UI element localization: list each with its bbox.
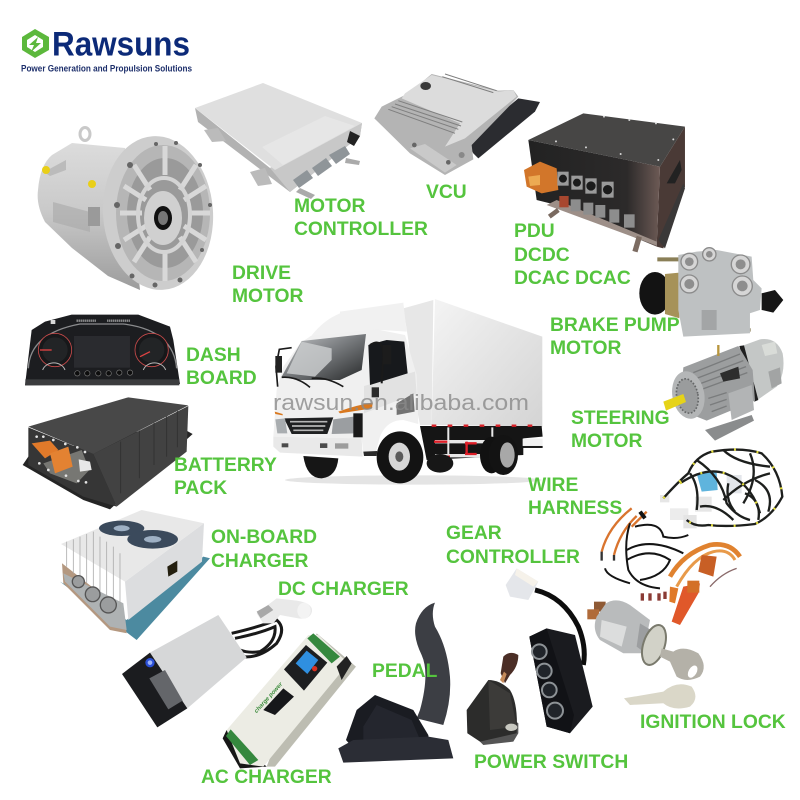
- label: battery pack: PACK: [174, 478, 227, 499]
- truck windshield: [282, 334, 366, 380]
- pedal base plate: [338, 737, 453, 763]
- controller top lid: [195, 83, 362, 170]
- switch black housing: [467, 680, 517, 742]
- PDU orange connector: [524, 162, 558, 193]
- terminal box: [720, 367, 740, 382]
- DC charger photo: [122, 598, 312, 727]
- thin purple lead: [710, 568, 737, 587]
- PDU base strip: [547, 200, 657, 246]
- motor hub and bearing: [144, 191, 182, 245]
- red and white side guard: [434, 427, 497, 457]
- truck grille: [284, 417, 333, 434]
- truck left mirror: [276, 348, 292, 387]
- wire harness photo: [602, 450, 782, 625]
- ignition bezel: [637, 622, 671, 668]
- orange and red connector bundle: [672, 583, 700, 625]
- dash housing: [25, 315, 180, 385]
- battery connector plate: [43, 450, 89, 483]
- battery right side: [93, 406, 188, 507]
- brake pump motor photo: [639, 248, 783, 337]
- dash centre screen: [74, 336, 130, 368]
- truck sun shade: [287, 342, 332, 377]
- label: PDU DCDC DCAC: PDU: [514, 221, 555, 242]
- label: steering motor: MOTOR: [571, 431, 642, 452]
- truck chassis frame: [420, 426, 543, 460]
- switch mounting hole: [505, 724, 517, 731]
- dash buttons: [75, 370, 133, 376]
- watermark: rawsun.en.alibaba.com: [273, 390, 529, 415]
- harness red terminals: [641, 592, 667, 601]
- pump studs: [657, 257, 680, 261]
- charger blue mounting plate: [60, 557, 210, 640]
- pump rubber dome: [639, 272, 671, 315]
- DC charger white gun: [257, 598, 312, 623]
- label: ignition lock: IGNITION LOCK: [640, 712, 786, 733]
- VCU cooling ribs: [388, 74, 497, 133]
- on-board charger photo: [60, 510, 210, 640]
- label: drive motor: DRIVE: [232, 263, 291, 284]
- motor lifting eye: [80, 128, 90, 140]
- PDU top lid: [528, 113, 685, 167]
- gear controller cable: [535, 590, 584, 665]
- label: wire harness: HARNESS: [528, 498, 622, 519]
- charger round sockets: [72, 576, 116, 613]
- logo wordmark: Rawsuns: [52, 26, 190, 64]
- red marker dashes: [432, 422, 542, 429]
- dash bottom strip: [25, 379, 179, 385]
- gear controller black body: [529, 628, 593, 733]
- AC charger dark base: [223, 730, 267, 768]
- label: VCU: VCU: [426, 182, 467, 203]
- AC charger side panel: [267, 633, 356, 767]
- pump black connector: [762, 290, 783, 313]
- ignition lock photo: [587, 600, 704, 709]
- power switch photo: [467, 653, 518, 745]
- DC charger black front: [122, 653, 187, 727]
- gear controller photo: [506, 568, 593, 733]
- ignition cylinder: [595, 600, 650, 653]
- yellow plugs: [42, 166, 50, 174]
- label: AC charger: AC CHARGER: [201, 767, 332, 788]
- ignition neck: [637, 623, 657, 657]
- label: on-board charger: ON-BOARD: [211, 527, 317, 548]
- VCU photo: [374, 74, 540, 175]
- DC charger vent: [149, 670, 183, 709]
- label: motor controller: MOTOR: [294, 196, 365, 217]
- logo bolt: [29, 37, 41, 52]
- DC charger blue button: [145, 658, 155, 667]
- logo icon: green hexagon bolt: [22, 29, 49, 58]
- truck front wheels: [303, 431, 423, 483]
- truck ground shadow: [285, 475, 542, 485]
- drive motor photo: [38, 128, 218, 294]
- label: motor controller: CONTROLLER: [294, 219, 428, 240]
- dash telltale strip: [77, 317, 130, 324]
- label: PDU DCDC DCAC: DCAC DCAC: [514, 268, 631, 289]
- label: brake pump motor: BRAKE PUMP: [550, 315, 680, 336]
- motor rear cap: [740, 339, 784, 402]
- label: dash board: BOARD: [186, 368, 257, 389]
- truck headlights: [275, 418, 287, 433]
- truck bumper: [273, 437, 363, 457]
- label: pedal: PEDAL: [372, 661, 438, 682]
- charger right face: [125, 523, 204, 620]
- dash left gauge: [38, 333, 72, 367]
- truck rear wheels: [427, 435, 518, 475]
- pump brass band: [665, 273, 679, 318]
- VCU upper cover: [402, 75, 517, 147]
- pump aluminium body: [678, 250, 762, 337]
- charger heatsink top: [61, 510, 204, 582]
- label: power switch: POWER SWITCH: [474, 752, 628, 773]
- lifting ring: [715, 345, 722, 356]
- switch brown handle: [501, 653, 518, 683]
- label: gear controller: CONTROLLER: [446, 547, 580, 568]
- label: dash board: DASH: [186, 345, 241, 366]
- truck door vent: [397, 393, 415, 415]
- motor cylinder body: [38, 143, 140, 290]
- dash small gauges: [43, 363, 65, 370]
- PDU round connectors: [557, 172, 614, 198]
- VCU front mount: [410, 144, 457, 173]
- charger fans: [99, 521, 144, 536]
- battery orange connectors: [32, 441, 58, 458]
- label: brake pump motor: MOTOR: [550, 338, 621, 359]
- AC charger side socket: [337, 656, 352, 680]
- pedal housing: [346, 695, 430, 748]
- motor controller photo: [195, 83, 362, 199]
- dashboard photo: [25, 315, 180, 385]
- ignition rear key: [624, 684, 695, 709]
- logo tagline: Power Generation and Propulsion Solutions: [21, 64, 192, 74]
- dash right gauge: [135, 333, 168, 367]
- motor dark band: [739, 345, 758, 402]
- label: battery pack: BATTERRY: [174, 455, 277, 476]
- label: drive motor: MOTOR: [232, 286, 303, 307]
- label: wire harness: WIRE: [528, 475, 578, 496]
- yellow shaft: [663, 394, 686, 411]
- controller connectors: [293, 146, 360, 199]
- PDU front face: [528, 140, 660, 247]
- motor feet: [705, 415, 754, 441]
- PDU lower connectors: [559, 196, 635, 228]
- ignition copper terminals: [594, 602, 606, 612]
- steering motor photo: [663, 339, 784, 441]
- harness connector blocks: [697, 472, 718, 492]
- label: on-board charger: CHARGER: [211, 551, 309, 572]
- controller side walls: [195, 108, 362, 192]
- battery base plate: [23, 423, 193, 509]
- pump ports: [680, 248, 752, 296]
- truck wipers: [282, 377, 343, 387]
- charger label: [167, 561, 177, 577]
- mounting lugs: [204, 128, 226, 142]
- AC charger front panel: [227, 635, 348, 767]
- VCU black connector: [467, 98, 540, 158]
- truck: [273, 299, 543, 485]
- PDU DCDC box photo: [524, 113, 685, 252]
- motor flange: [98, 132, 218, 294]
- label: PDU DCDC DCAC: DCDC: [514, 245, 570, 266]
- logo: [21, 26, 192, 74]
- truck door window: [368, 340, 408, 385]
- harness yellow ties: [663, 450, 782, 526]
- switch copper stem: [500, 672, 507, 683]
- switch base: [475, 715, 518, 745]
- battery front face: [28, 427, 117, 507]
- truck roof fairing: [311, 303, 407, 337]
- label: gear controller: GEAR: [446, 523, 502, 544]
- truck cab body: [273, 329, 418, 452]
- AC charger photo: [223, 633, 356, 768]
- battery top face: [28, 397, 188, 454]
- VCU cap: [420, 82, 431, 90]
- VCU base plate: [374, 74, 518, 175]
- pedal lever arm: [415, 603, 450, 725]
- truck cargo box front strip: [403, 300, 433, 425]
- orange high-voltage cables right: [670, 544, 740, 577]
- label: DC charger: DC CHARGER: [278, 579, 409, 600]
- battery white bolts: [35, 435, 87, 484]
- motor finned body: [680, 346, 755, 421]
- PDU side bracket: [667, 160, 682, 183]
- black control harness: [605, 512, 688, 588]
- truck door shading: [364, 372, 417, 413]
- PDU coolant pipes: [549, 210, 558, 217]
- gear controller knobs: [532, 644, 563, 719]
- battery pack photo: [23, 397, 193, 509]
- DC cables: [232, 620, 282, 657]
- label: steering motor: STEERING: [571, 408, 670, 429]
- orange battery cables left: [602, 508, 647, 555]
- PDU side panel: [657, 127, 685, 248]
- gear controller white plug: [506, 568, 538, 600]
- charger front face: [62, 563, 127, 633]
- black dashboard harness: [663, 450, 782, 526]
- truck cargo box side: [432, 299, 542, 427]
- AC charger screen panel: [284, 645, 327, 691]
- motor front bell: [668, 369, 708, 421]
- AC charger socket: [263, 688, 294, 715]
- ignition key: [660, 648, 704, 680]
- pedal photo: [338, 603, 453, 763]
- truck right mirror: [370, 343, 383, 383]
- AC charger brand text: charge power: [254, 681, 285, 715]
- orange plugs: [698, 555, 717, 577]
- DC charger silver case: [150, 615, 247, 708]
